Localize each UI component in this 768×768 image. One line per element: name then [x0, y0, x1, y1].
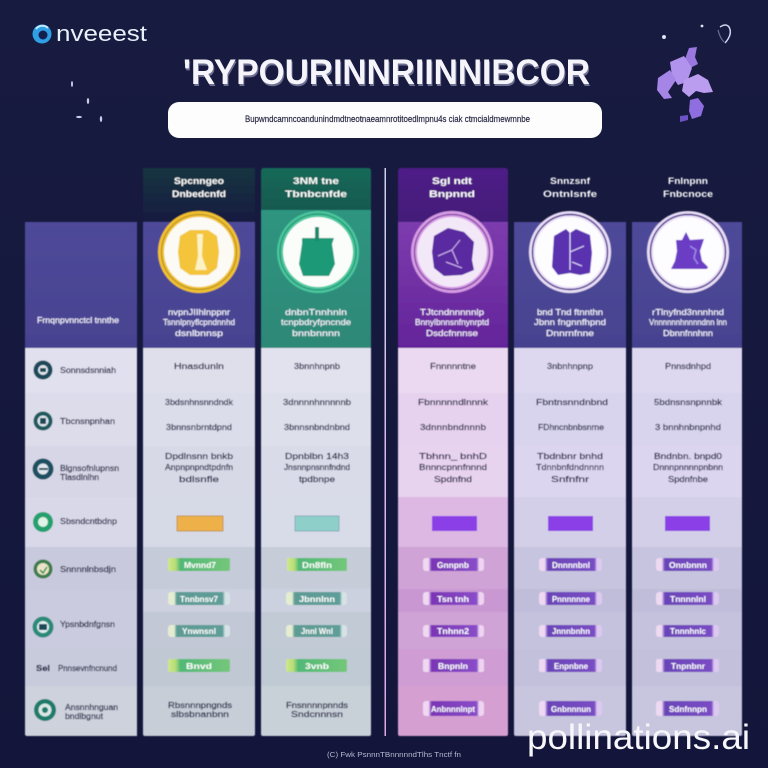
- row label 8: [34, 699, 118, 721]
- row label 6: Ypsnbdnfgnsn: [60, 620, 115, 629]
- column 3 top band: Bnpnnd: [429, 189, 475, 199]
- column 5 description: rTlnyfnd3nnnhnd: [652, 308, 724, 317]
- column 1 values: 3bnnsnbrntdpnd: [166, 423, 232, 432]
- subtitle box: [168, 102, 602, 138]
- column 2 footer note: [286, 701, 348, 719]
- column 5 pill 4: Tnpnbnr: [671, 662, 705, 671]
- column 5 pill 1: [656, 558, 719, 571]
- column 1 footer note: slbsbnanbnn: [171, 710, 229, 719]
- column 4 pill 2: [539, 592, 602, 605]
- panel: row labels: [25, 222, 137, 736]
- column 1 pill 4: Bnvd: [186, 662, 212, 671]
- column 3 description: TJtcndnnnnnlp: [420, 308, 485, 317]
- row label 3: [32, 458, 119, 482]
- column 4 description: Jbnn fngnnfhpnd: [534, 318, 606, 327]
- column 2 footer note: Fnsnnnnpnnds: [286, 701, 348, 710]
- column 5 values: Bndnbn. bnpd0: [654, 452, 723, 461]
- row label 6: [32, 616, 115, 638]
- column 4 pill 4: Enpnbne: [554, 662, 589, 671]
- column 3 description: [415, 308, 489, 338]
- column 5 values: [653, 362, 723, 484]
- column 1 pill 3: Ynwnsnl: [182, 627, 216, 636]
- column 2 pill 3: [286, 625, 347, 637]
- column 4 values: Snfnfnr: [551, 475, 589, 484]
- column 2 pill 3: Jnnl Wnl: [301, 627, 333, 636]
- column 1 footer note: Rbsnnnpngnds: [168, 701, 232, 710]
- column 4 pill 3: Jnnnbnhn: [552, 627, 590, 636]
- column 3 pill 5: Anbnnnlnpt: [431, 705, 475, 714]
- panel: column 3 magenta: [398, 168, 508, 736]
- column 2 values: tpdbnpe: [299, 475, 336, 484]
- column 1 top band: [143, 168, 255, 222]
- column 4 pill 5: [539, 701, 602, 716]
- column 1 pill 2: [168, 592, 230, 605]
- column 2 top band: [261, 168, 371, 210]
- column 5 rating swatch: [665, 516, 710, 531]
- column 3 description: Dsdcfnnnse: [426, 329, 479, 338]
- column 2 description: [281, 308, 352, 338]
- column 2 pill 2: [286, 592, 347, 605]
- column 3 rating swatch: [432, 516, 477, 531]
- column 4 pill 5: Gnbnnnun: [551, 705, 591, 714]
- column 3 pill 4: [423, 659, 484, 672]
- column 5 values: Pnnsdnhpd: [665, 362, 711, 371]
- logo: [32, 21, 147, 46]
- column 1 values: Anpnpnpndtpdnfn: [165, 463, 233, 472]
- column 2 values: 3dnnnnhnnnnnb: [283, 398, 352, 407]
- column 5 description: Vnnnnnnhnnnndnn lnn: [649, 318, 727, 327]
- column 2 top band: Tbnbcnfde: [285, 189, 347, 199]
- column 5 pill 2: [656, 592, 719, 605]
- column 1 values: Hnasdunln: [174, 362, 224, 371]
- column 2 description: tcnpbdryfpncnde: [281, 318, 352, 327]
- column 3 pill 1: [423, 558, 484, 571]
- column 4 top band: Snnzsnf: [550, 176, 591, 186]
- column 1 pill 1: [168, 558, 230, 571]
- column 2 pill 1: Dn8fln: [302, 561, 332, 570]
- row label 5: [34, 560, 116, 578]
- column 4 rating swatch: [548, 516, 593, 531]
- logo wordmark: nveeest: [56, 21, 147, 46]
- column 1 values: bdlsnfle: [179, 475, 220, 484]
- column 2 pill 4: [286, 659, 347, 672]
- column 3 pill 5: [423, 701, 484, 716]
- subtitle text: Bupwndcamncoandunindmdtneotnaeamnrotitoedlmpnu4s ciak ctmcialdmewmnbe: [245, 114, 530, 125]
- column 1 pill 1: Mvnnd7: [184, 561, 217, 570]
- column 4 pill 3: [539, 625, 602, 637]
- column 2 rating swatch: [295, 516, 339, 531]
- icon: violet plant: [529, 211, 611, 293]
- column 1 description: Tsnnlpnyflcpndnnhd: [163, 318, 235, 327]
- column 4 values: 3nbnhnpnp: [547, 362, 594, 371]
- column 1 footer note: [168, 701, 232, 719]
- column 1 top band: Spcnngeo: [174, 176, 225, 186]
- column 3 pill 2: [423, 592, 484, 605]
- decorative sparkles: left: [71, 81, 102, 122]
- column 5 values: 3 bnnhnbnpnhd: [655, 423, 721, 432]
- column 4 top band: Ontnlsnfe: [543, 189, 597, 199]
- row label 4: Sbsndcntbdnp: [60, 517, 118, 526]
- column 5 pill 3: Tnnnhnlc: [670, 627, 707, 636]
- column 3 top band: Sgl ndt: [432, 176, 472, 186]
- column 5 top band: Fnbcnoce: [663, 189, 713, 199]
- column 1 pill 3: [168, 625, 230, 637]
- label header cell: [25, 222, 137, 348]
- panel: column 2 green: [261, 168, 371, 736]
- column 4 description: Dnnrnfnne: [546, 329, 595, 338]
- center divider: [384, 168, 386, 736]
- column 3 values: Bnnncpnnfnnnd: [419, 463, 487, 472]
- panel: column 1 gold: [143, 168, 255, 736]
- column 3 top band: [398, 168, 508, 222]
- column 1 values: 3bdsnhnsnndndk: [165, 398, 234, 407]
- column 3 values: [418, 362, 489, 484]
- column 5 description: [649, 308, 727, 338]
- column 4 values: Fbntnsnndnbnd: [536, 398, 608, 407]
- column 2 values: [283, 362, 352, 484]
- column 3 pill 2: Tsn tnh: [437, 595, 469, 604]
- row label 8: bndlbgnut: [65, 712, 104, 721]
- column 5 top band: Fnlnpnn: [668, 176, 708, 186]
- column 1 values: [165, 362, 234, 484]
- column 4 pill 4: [539, 659, 602, 672]
- column 4 top band: [543, 176, 597, 199]
- icon: purple brain: [411, 211, 493, 293]
- column 4 pill 1: Dnnnnbnl: [552, 561, 590, 570]
- row label 7: Sel: [36, 664, 50, 673]
- column 3 values: Spdnfnd: [434, 475, 472, 484]
- row label 1: [34, 360, 116, 380]
- icon: green cup: [277, 211, 359, 293]
- icon: gold shield: [158, 211, 240, 293]
- panel: column 5 violet: [632, 176, 742, 736]
- column 5 pill 3: [656, 625, 719, 637]
- column 5 description: Dbnnfnnhnn: [663, 329, 713, 338]
- column 4 pill 2: Pnnnnnne: [552, 595, 591, 604]
- column 3 values: Fnnnnntne: [430, 362, 477, 371]
- column 4 values: [536, 362, 608, 484]
- row label 1: Sonnsdsnniah: [60, 366, 116, 375]
- column 2 description: dnbnTnnhnln: [285, 308, 347, 317]
- column 3 pill 4: Bnpnln: [438, 662, 468, 671]
- column 3 values: Fbnnnnndlnnnk: [418, 398, 489, 407]
- column 2 top band: 3NM tne: [293, 176, 339, 186]
- column 2 pill 4: 3vnb: [305, 662, 329, 671]
- column 1 pill 2: Tnnbnsv7: [180, 595, 219, 604]
- label header cell: Frnqnpvnnctcl tnnthe: [37, 316, 120, 325]
- column 2 pill 2: Jbnnlnn: [299, 595, 335, 604]
- column 1 rating swatch: [177, 516, 223, 531]
- column 3 description: Bnnylbnnsnfnynrptd: [415, 318, 489, 327]
- column 4 values: Tdnnbnfdndnnnn: [536, 463, 604, 472]
- row label 4: [33, 512, 118, 532]
- column 5 values: Spdnfnbe: [668, 475, 709, 484]
- icon: violet figure: [647, 211, 729, 293]
- column 5 values: 5bdnsnsnpnnbk: [654, 398, 723, 407]
- column 1 top band: Dnbedcnfd: [172, 189, 226, 199]
- row label 3: Blgnsofnlupnsn: [60, 464, 119, 473]
- column 2 description: bnnbnnnn: [292, 329, 340, 338]
- column 3 values: 3dnnnbndnnnb: [420, 423, 487, 432]
- column 4 pill 1: [539, 558, 602, 571]
- row label 2: [34, 412, 115, 430]
- column 3 values: Tbhnn_ bnhD: [419, 452, 487, 461]
- column 5 values: Dnnnpnnnnpnbnn: [653, 463, 723, 472]
- column 4 values: FDhncnbnbsnrne: [538, 423, 605, 432]
- column 2 values: 3bnnhnpnb: [294, 362, 341, 371]
- column 2 pill 1: [287, 558, 347, 571]
- column 5 pill 2: Tnnnnlnl: [670, 595, 706, 604]
- column 4 description: bnd Tnd ftnnthn: [537, 308, 603, 317]
- decorative illustration: purple blossom: [657, 25, 730, 122]
- column 3 pill 3: [423, 625, 484, 637]
- row label 7: Pnnsevnfncnund: [58, 664, 117, 673]
- row label 3: Tlasdlnlhn: [60, 473, 99, 482]
- column 1 description: [163, 308, 235, 338]
- row label 5: Snnnnlnbsdjn: [60, 565, 116, 574]
- column 5 pill 1: Onnbnnn: [669, 561, 707, 570]
- column 5 top band: [663, 176, 713, 199]
- title: 'RYPOURINNRIINNIBCOR: [184, 55, 591, 94]
- panel: column 4 violet: [514, 176, 626, 736]
- column 1 description: dsnlbnnsp: [175, 329, 224, 338]
- column 2 values: 3bnnsnbndnbnd: [284, 423, 350, 432]
- column 4 description: [534, 308, 606, 338]
- column 3 pill 3: Tnhnn2: [437, 627, 470, 636]
- column 1 values: Dpdlnsnn bnkb: [165, 452, 234, 461]
- row label 2: Tbcnsnpnhan: [60, 417, 115, 426]
- column 5 pill 5: Sdnfnnpn: [669, 705, 707, 714]
- column 5 pill 5: [656, 701, 719, 716]
- column 2 values: Dpnblbn 14h3: [285, 452, 350, 461]
- row label 8: Ansnnhnguan: [65, 703, 118, 712]
- footer note: (C) Fwk PsnnnTBnnnnndTlhs Tnctf fn: [327, 750, 461, 759]
- column 2 footer note: Sndcnnnsn: [291, 710, 343, 719]
- watermark: pollinations.ai: [527, 718, 750, 757]
- column 1 pill 4: [168, 659, 230, 672]
- column 2 values: Jnsnnpnsnnfndnd: [284, 463, 350, 472]
- title: 'RYPOURINNRIINNIBCOR: [183, 53, 590, 92]
- column 1 description: nvpnJIIhlnppnr: [168, 308, 230, 317]
- column 4 values: Tbdnbnr bnhd: [537, 452, 603, 461]
- column 5 pill 4: [656, 659, 719, 672]
- icon: logo badge: [32, 24, 52, 44]
- column 3 pill 1: Gnnpnb: [437, 561, 469, 570]
